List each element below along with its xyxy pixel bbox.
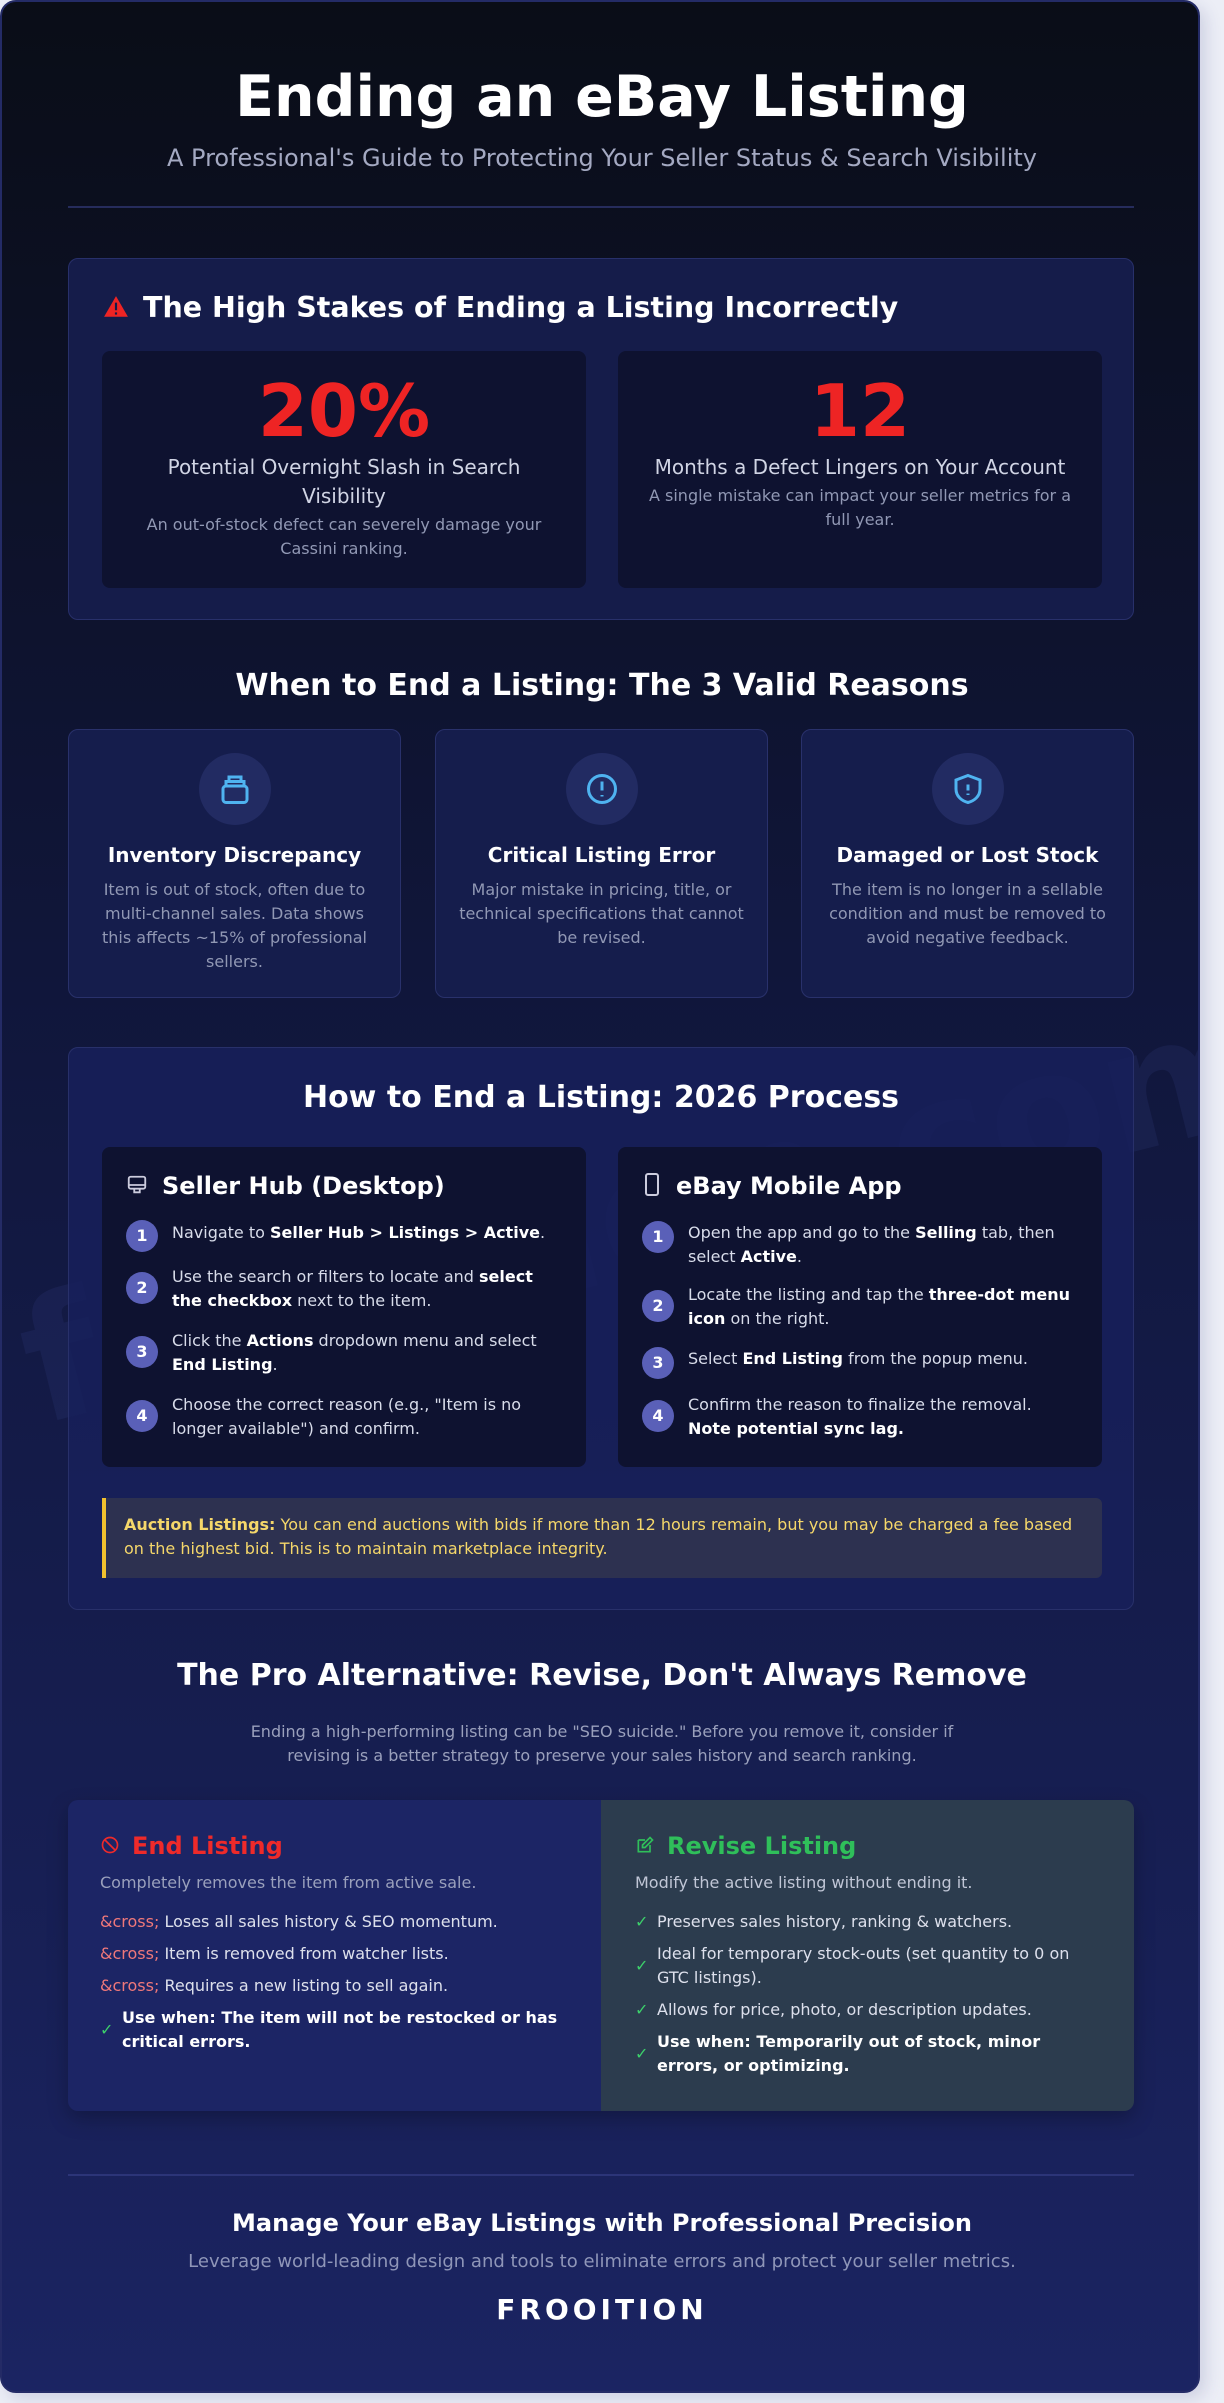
panel: end listing: ✓ [100, 2020, 113, 2039]
panel: end listing: Completely removes the item from active sale. [100, 1873, 476, 1892]
panel: seller hub: 4 [136, 1406, 148, 1425]
panel: seller hub: Click the Actions dropdown menu and select End Listing. [172, 1331, 537, 1374]
panel: seller hub: Navigate to Seller Hub > Listings > Active. [172, 1223, 545, 1242]
panel: end listing [68, 1800, 601, 2111]
panel: revise listing: Allows for price, photo, or description updates. [657, 2000, 1032, 2019]
card: critical error: Critical Listing Error [488, 843, 715, 867]
icon: alert circle [566, 753, 638, 825]
panel: revise listing: Revise Listing [667, 1832, 856, 1860]
stat card: 20%: An out-of-stock defect can severely damage your Cassini ranking. [147, 515, 541, 558]
card: critical error: Major mistake in pricing, title, or technical specifications that cannot be revised. [459, 880, 744, 947]
stat card: 20% [102, 351, 586, 588]
panel: seller hub: Use the search or filters to locate and select the checkbox next to the item. [172, 1267, 533, 1310]
card: inventory [68, 729, 401, 998]
stat card: 12 [618, 351, 1102, 588]
card: inventory: Inventory Discrepancy [108, 843, 361, 867]
panel: mobile app: 1 [652, 1227, 664, 1246]
panel: end listing: End Listing [132, 1832, 283, 1860]
stat card: 12: A single mistake can impact your seller metrics for a full year. [649, 486, 1071, 529]
card: damaged [801, 729, 1134, 998]
stat card: 20%: Potential Overnight Slash in Search Visibility [168, 455, 520, 508]
heading: pro alternative: The Pro Alternative: Revise, Don't Always Remove [177, 1658, 1027, 1693]
panel: revise listing [601, 1800, 1134, 2111]
panel: revise listing: Modify the active listing without ending it. [635, 1873, 972, 1892]
panel: revise listing: ✓ [635, 2000, 648, 2019]
panel: seller hub: 2 [136, 1278, 148, 1297]
heading: high stakes: The High Stakes of Ending a Listing Incorrectly [143, 291, 898, 324]
footer heading: Manage Your eBay Listings with Professional Precision [232, 2209, 972, 2237]
panel: seller hub: 1 [136, 1226, 148, 1245]
panel: end listing: &cross; Requires a new listing to sell again. [100, 1976, 448, 1995]
panel: process [68, 1047, 1134, 1610]
panel: end listing: &cross; Loses all sales history & SEO momentum. [100, 1912, 498, 1931]
heading: seller hub: Seller Hub (Desktop) [162, 1172, 445, 1200]
panel: revise listing: Ideal for temporary stock-outs (set quantity to 0 on GTC listings). [657, 1944, 1069, 1987]
icon: shield [932, 753, 1004, 825]
panel: end listing: &cross; Item is removed from watcher lists. [100, 1944, 449, 1963]
panel: mobile app: Open the app and go to the Selling tab, then select Active. [688, 1223, 1055, 1266]
panel: mobile app: Select End Listing from the popup menu. [688, 1349, 1028, 1368]
heading: process: How to End a Listing: 2026 Process [303, 1080, 899, 1115]
comparison [68, 1800, 1134, 2111]
heading: mobile app: eBay Mobile App [676, 1172, 902, 1200]
panel: revise listing: Preserves sales history, ranking & watchers. [657, 1912, 1012, 1931]
panel: seller hub: 3 [136, 1342, 148, 1361]
subtitle: A Professional's Guide to Protecting Your Seller Status & Search Visibility [167, 144, 1037, 172]
footer text: Leverage world-leading design and tools to eliminate errors and protect your seller metrics. [188, 2251, 1016, 2272]
card: critical error [435, 729, 768, 998]
stat card: 20%: 20% [258, 369, 430, 453]
card: damaged: The item is no longer in a sellable condition and must be removed to avoid negative feedback. [829, 880, 1106, 947]
callout: auction listings [102, 1498, 1102, 1578]
card: inventory: Item is out of stock, often due to multi-channel sales. Data shows this affects ~15% of professional sellers. [102, 880, 367, 971]
panel: high stakes [68, 258, 1134, 620]
heading: valid reasons: When to End a Listing: The 3 Valid Reasons [235, 668, 969, 703]
panel: mobile app [618, 1147, 1102, 1467]
card: damaged: Damaged or Lost Stock [837, 843, 1098, 867]
panel: seller hub [102, 1147, 586, 1467]
title: Ending an eBay Listing [235, 64, 969, 130]
panel: mobile app: 2 [652, 1296, 664, 1315]
panel: mobile app: Confirm the reason to finalize the removal. [688, 1395, 1032, 1414]
icon: box [199, 753, 271, 825]
panel: mobile app: Locate the listing and tap the three-dot menu icon on the right. [688, 1285, 1070, 1328]
panel: revise listing: Use when: Temporarily out of stock, minor errors, or optimizing. [657, 2032, 1040, 2075]
panel: revise listing: ✓ [635, 1912, 648, 1931]
panel: end listing: Use when: The item will not be restocked or has critical errors. [122, 2008, 557, 2051]
callout: auction listings: Auction Listings: You can end auctions with bids if more than 12 hours remain, but you may be charged a fee based on the highest bid. This is to maintain marketplace integrity. [124, 1515, 1072, 1558]
text: pro alternative desc: Ending a high-performing listing can be "SEO suicide." Before you remove it, consider if revising is a better strategy to preserve your sales history and search ranking. [251, 1722, 953, 1765]
panel: mobile app: 3 [652, 1353, 664, 1372]
panel: revise listing: ✓ [635, 1956, 648, 1975]
panel: mobile app: 4 [652, 1406, 664, 1425]
panel: mobile app: Note potential sync lag. [688, 1419, 904, 1438]
panel: revise listing: ✓ [635, 2044, 648, 2063]
logo: FROOITION: FROOITION [496, 2293, 708, 2326]
panel: seller hub: Choose the correct reason (e.g., "Item is no longer available") and confirm. [172, 1395, 521, 1438]
stat card: 12: 12 [810, 369, 910, 453]
stat card: 12: Months a Defect Lingers on Your Account [655, 455, 1065, 479]
